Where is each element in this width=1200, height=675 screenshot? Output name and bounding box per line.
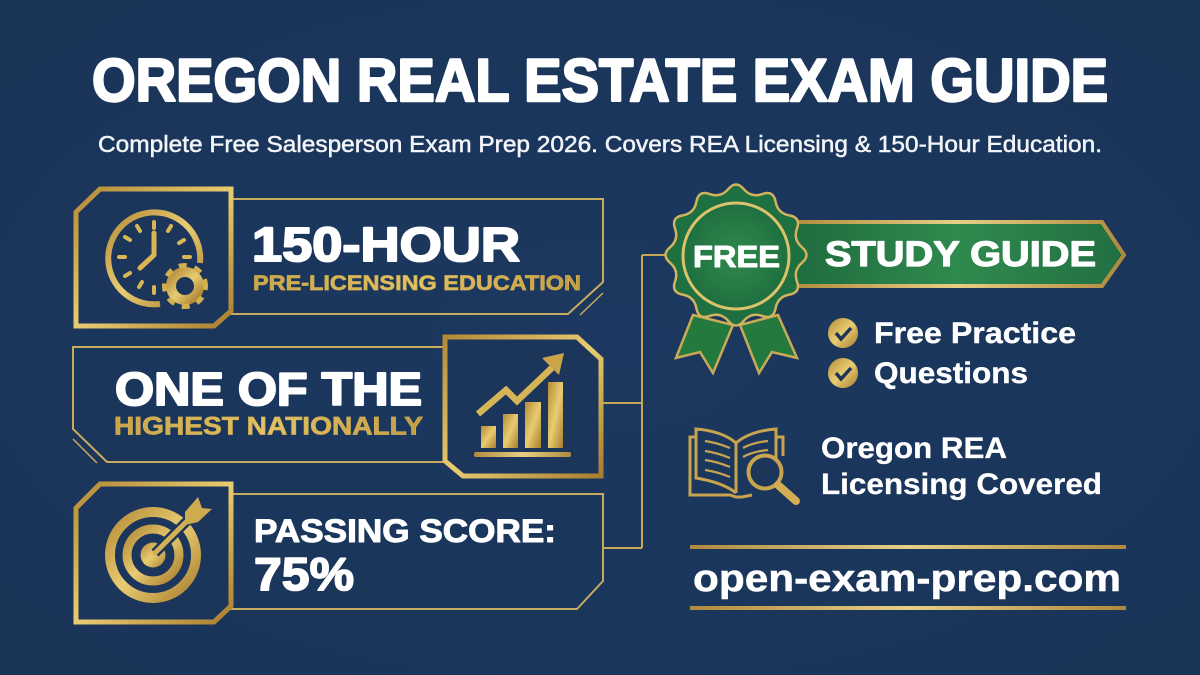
panel: passing score bbox=[76, 484, 603, 622]
panel: 150-hour education bbox=[76, 189, 603, 326]
panel outline bbox=[73, 347, 447, 462]
website footer bbox=[690, 545, 1126, 610]
text: oregon rea licensing covered: Licensing Covered bbox=[821, 468, 1102, 501]
badge: free rosette bbox=[665, 184, 807, 373]
panel: one of the highest nationally bbox=[73, 337, 601, 476]
headline: one of the: ONE OF THE bbox=[115, 363, 422, 415]
stat: 150-hour: 150-HOUR bbox=[252, 219, 520, 272]
icon: check 1 bbox=[828, 318, 858, 348]
ribbon tails bbox=[676, 315, 733, 373]
text: oregon rea licensing covered: Oregon REA bbox=[821, 432, 1007, 465]
icon frame bbox=[76, 189, 231, 326]
label: highest nationally: HIGHEST NATIONALLY bbox=[114, 412, 423, 440]
icon frame bbox=[76, 484, 231, 622]
label: pre-licensing education: PRE-LICENSING EDUCATION bbox=[253, 272, 581, 295]
rosette seal bbox=[665, 184, 807, 325]
icon frame bbox=[445, 337, 601, 476]
label: free: FREE bbox=[693, 239, 780, 274]
label: passing score: PASSING SCORE: bbox=[254, 513, 556, 549]
url: open-exam-prep.com bbox=[693, 558, 1121, 600]
panel outline bbox=[214, 494, 603, 609]
banner ribbon bbox=[790, 222, 1124, 286]
banner: study guide bbox=[790, 222, 1124, 286]
heading: study guide: STUDY GUIDE bbox=[825, 235, 1096, 274]
text: free practice: Free Practice bbox=[874, 317, 1076, 350]
icon: rising bar chart bbox=[474, 353, 571, 457]
icon: book with magnifier bbox=[690, 429, 796, 501]
text: oregon rea licensing covered bbox=[821, 432, 1102, 501]
gear bbox=[164, 266, 206, 306]
list: free practice questions bbox=[828, 317, 1076, 390]
stat: 75%: 75% bbox=[254, 548, 354, 600]
text: questions: Questions bbox=[874, 357, 1028, 390]
subtitle: Complete Free Salesperson Exam Prep 2026. Covers REA Licensing & 150-Hour Education. bbox=[98, 131, 1102, 157]
connector lines bbox=[603, 255, 672, 548]
icon: clock with gear bbox=[108, 212, 206, 306]
title: OREGON REAL ESTATE EXAM GUIDE bbox=[92, 47, 1108, 114]
panel outline bbox=[214, 199, 603, 314]
icon: check 2 bbox=[828, 358, 858, 388]
icon: target with arrow bbox=[110, 497, 212, 598]
